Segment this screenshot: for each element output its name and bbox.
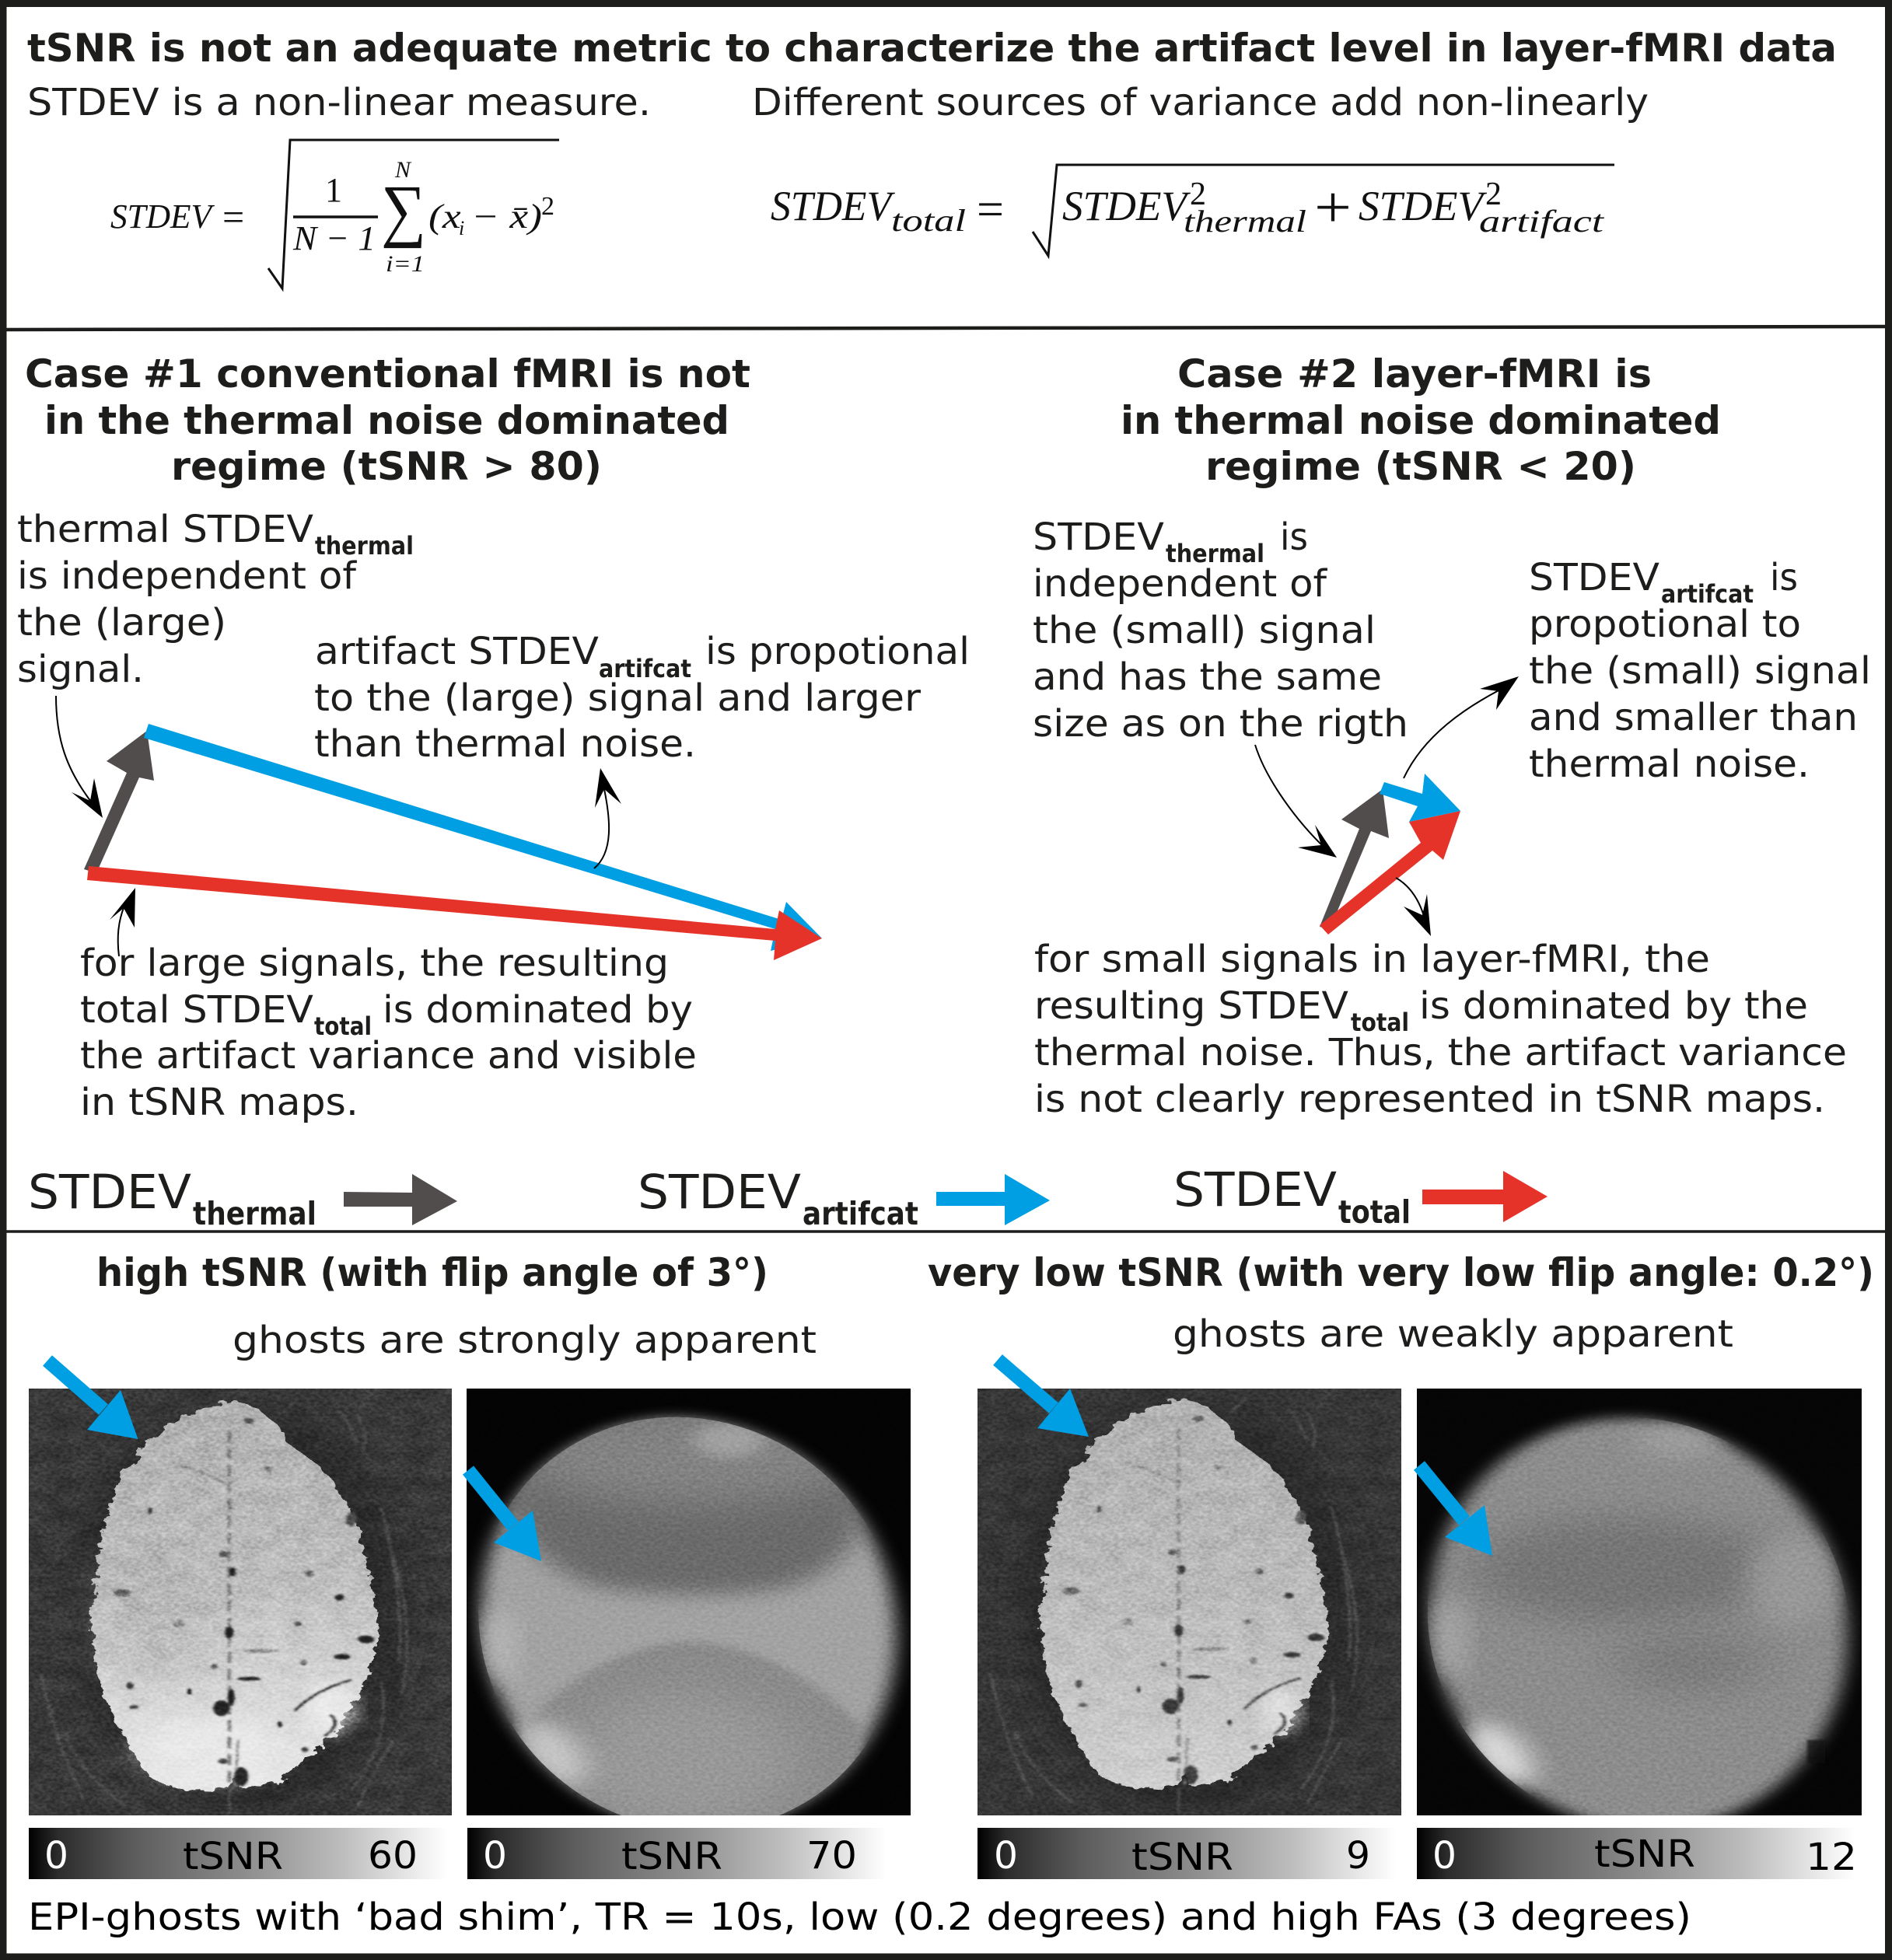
text: artifact note: to the (large) signal and larger [314, 676, 921, 720]
arrow: artifact vector [1380, 774, 1460, 822]
text: total note: total STDEV [80, 988, 313, 1032]
text: sources add non-linearly: Different sources of variance add non-linearly [752, 81, 1649, 124]
text: thermal note [17, 508, 414, 691]
text: artifact note: artifcat [599, 654, 691, 683]
arrow: pointer to total [1396, 878, 1431, 936]
arrow: thermal vector [1320, 789, 1389, 929]
text: thermal note: thermal [1166, 539, 1264, 568]
heading: high tSNR: high tSNR (with flip angle of 3°) [96, 1250, 768, 1295]
colorbar 4: tSNR [1594, 1832, 1695, 1876]
text: artifact note: and smaller than [1529, 696, 1858, 739]
legend item: artifact [638, 1165, 1050, 1232]
text: total note: for small signals in layer-fMRI, the [1034, 938, 1710, 981]
arrow: pointer to total [110, 888, 135, 956]
formula: STDEV total: 2 [1190, 176, 1206, 212]
arrow: artifact vector [144, 724, 822, 951]
colorbar 3: tSNR [1131, 1836, 1233, 1879]
heading: case 2: regime (tSNR < 20) [1205, 444, 1636, 489]
heading: case 2 [1121, 351, 1721, 489]
formula: STDEV total: thermal [1184, 204, 1306, 239]
formula: STDEV: ∑ [381, 172, 426, 249]
title: tSNR is not an adequate metric to characterize the artifact level in layer-fMRI data [27, 26, 1837, 71]
formula: STDEV total: + [1314, 175, 1352, 240]
heading: case 2: in thermal noise dominated [1121, 398, 1721, 443]
formula: STDEV: 1 [325, 171, 342, 209]
text: thermal note: signal. [17, 648, 144, 691]
text: total note: is dominated by the [1419, 984, 1808, 1028]
heading: case 1: Case #1 conventional fMRI is not [25, 351, 750, 397]
heading: case 1: regime (tSNR > 80) [171, 444, 602, 489]
arrow: thermal vector [84, 731, 154, 873]
formula: STDEV: = [222, 195, 244, 239]
arrow: blue pointer image 4 [1419, 1466, 1492, 1556]
panel: case 2 [1033, 351, 1871, 1121]
text: thermal note: the (small) signal [1033, 609, 1376, 652]
formula: STDEV total: = [977, 183, 1004, 236]
legend item: artifact: artifcat [803, 1195, 918, 1232]
legend item: artifact: STDEV [638, 1165, 801, 1220]
colorbar 3: 9 [1346, 1834, 1370, 1878]
arrow: blue pointer image 1 [47, 1361, 138, 1439]
panel: formulas [27, 81, 1649, 288]
colorbar 1: tSNR [183, 1835, 283, 1878]
panel: case 1 [17, 351, 970, 1124]
formula: STDEV total: STDEV [1062, 183, 1191, 229]
text: total note: is dominated by [383, 988, 693, 1032]
colorbar 4: 12 [1806, 1836, 1857, 1879]
text: thermal note: thermal [315, 531, 414, 561]
legend item: total: total [1338, 1193, 1411, 1231]
formula: STDEV: (x − x̄) [428, 197, 542, 236]
text: thermal note: the (large) [17, 601, 226, 645]
text: STDEV is non-linear: STDEV is a non-linear measure. [27, 81, 651, 124]
formula: STDEV total [771, 165, 1614, 256]
formula: STDEV: N [394, 157, 412, 183]
text: total note: resulting STDEV [1034, 984, 1348, 1028]
text: total note [1034, 938, 1847, 1121]
text: thermal note: is [1280, 515, 1308, 559]
text: thermal note: STDEV [1033, 515, 1164, 559]
arrow: pointer to artifact note [594, 768, 621, 868]
colorbar 1: 0 [44, 1834, 68, 1878]
colorbar 4 [1417, 1828, 1857, 1879]
text: artifact note [314, 630, 970, 766]
text: artifact note: STDEV [1529, 556, 1659, 599]
arrow: blue pointer image 2 [468, 1470, 541, 1561]
formula: STDEV: STDEV [110, 197, 215, 236]
text: artifact note: the (small) signal [1529, 649, 1871, 693]
legend item: thermal: thermal [193, 1195, 316, 1232]
text: artifact note: thermal noise. [1529, 742, 1810, 786]
text: artifact note: propotional to [1529, 603, 1801, 646]
image: ghost map very low tSNR [1417, 1389, 1862, 1815]
caption: EPI-ghosts with ‘bad shim’, TR = 10s, low (0.2 degrees) and high FAs (3 degrees) [28, 1895, 1691, 1939]
heading: case 1: in the thermal noise dominated [44, 398, 729, 443]
arrow: blue pointer image 3 [998, 1360, 1089, 1437]
arrow: pointer to artifact note [1404, 676, 1519, 778]
text: thermal note: is independent of [17, 554, 357, 598]
formula: STDEV [110, 140, 559, 288]
arrow: pointer to thermal [1255, 745, 1337, 858]
formula: STDEV total: STDEV [1359, 183, 1488, 229]
heading: very low tSNR: very low tSNR (with very low flip angle: 0.2°) [928, 1250, 1874, 1295]
formula: STDEV: N − 1 [292, 219, 376, 257]
formula: STDEV total: artifact [1479, 204, 1604, 239]
text: thermal note: independent of [1033, 562, 1327, 606]
text: weakly apparent: ghosts are weakly apparent [1173, 1312, 1733, 1356]
colorbar 2 [467, 1828, 887, 1879]
text: thermal note: size as on the rigth [1033, 702, 1408, 746]
text: total note: the artifact variance and visible [80, 1034, 697, 1078]
image: brain very low tSNR [977, 1389, 1401, 1815]
text: thermal note [1033, 515, 1408, 746]
colorbar 1: 60 [368, 1834, 418, 1878]
text: artifact note [1529, 556, 1871, 786]
text: total note: total [1351, 1008, 1409, 1037]
legend item: thermal: STDEV [28, 1165, 191, 1220]
formula: STDEV total: total [891, 203, 966, 238]
formula: STDEV total: 2 [1485, 176, 1502, 212]
colorbar 4: 0 [1432, 1834, 1457, 1878]
panel: EPI data headings [96, 1250, 1874, 1362]
legend item: total: STDEV [1173, 1162, 1337, 1218]
text: total note [80, 942, 697, 1124]
text: artifact note: artifact STDEV [315, 630, 599, 673]
text: thermal note: thermal STDEV [17, 508, 313, 551]
text: total note: is not clearly represented in tSNR maps. [1034, 1078, 1825, 1121]
text: total note: for large signals, the resulting [80, 942, 669, 985]
formula: STDEV: i=1 [386, 251, 425, 277]
text: total note: thermal noise. Thus, the artifact variance [1034, 1031, 1847, 1074]
text: artifact note: is propotional [705, 630, 970, 673]
text: artifact note: than thermal noise. [314, 722, 696, 766]
text: strongly apparent: ghosts are strongly apparent [233, 1319, 817, 1362]
arrow: total vector [87, 866, 822, 960]
colorbar 2: tSNR [621, 1835, 722, 1878]
formula: STDEV total: STDEV [771, 183, 896, 229]
text: total note: in tSNR maps. [80, 1081, 358, 1124]
text: artifact note: is [1770, 556, 1798, 599]
legend item: thermal [28, 1165, 457, 1232]
formula: STDEV: i [459, 217, 464, 239]
legend item: total [1173, 1162, 1548, 1231]
heading: case 2: Case #2 layer-fMRI is [1177, 351, 1652, 397]
text: total note: total [314, 1011, 372, 1041]
image: brain high tSNR [29, 1389, 452, 1815]
legend [28, 1162, 1548, 1232]
arrow: pointer to thermal [56, 696, 103, 818]
colorbar 3: 0 [994, 1834, 1018, 1878]
colorbar 1 [29, 1828, 447, 1879]
text: thermal note: and has the same [1033, 655, 1382, 699]
colorbar 2: 0 [483, 1834, 507, 1878]
heading: case 1 [25, 351, 750, 489]
text: artifact note: artifcat [1661, 579, 1754, 609]
arrow: total vector [1320, 811, 1460, 935]
image: ghost map high tSNR [467, 1389, 911, 1815]
colorbar 2: 70 [806, 1834, 857, 1878]
formula: STDEV: 2 [541, 192, 554, 221]
colorbar 3 [977, 1828, 1396, 1879]
